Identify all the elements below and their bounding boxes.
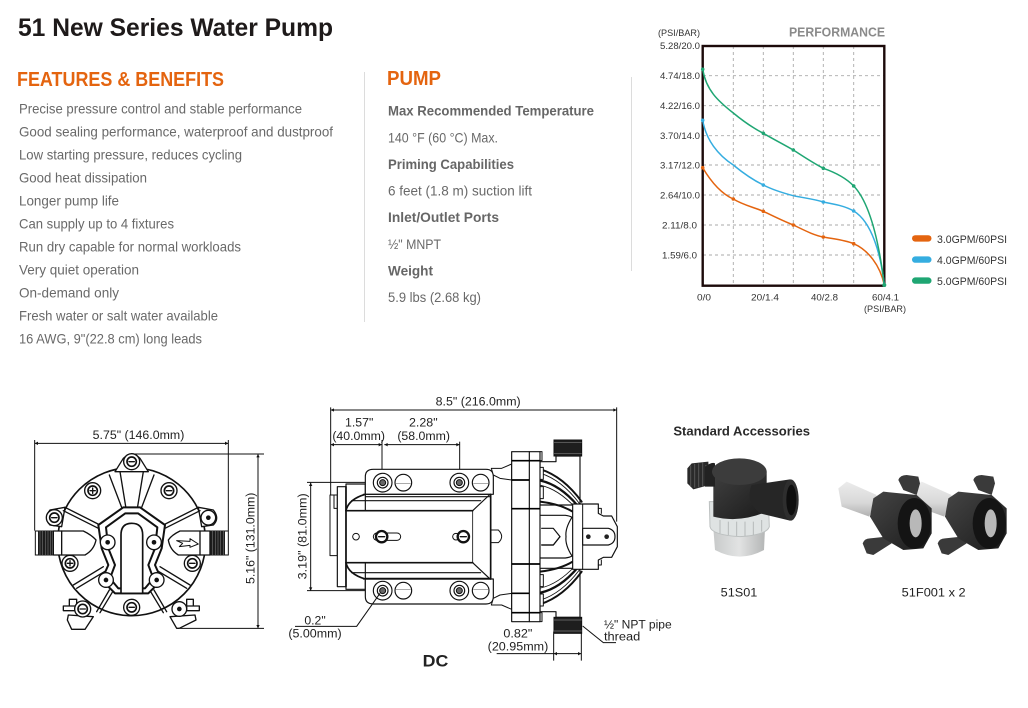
dimension: 2.28 inch: 2.28" (409, 416, 438, 430)
y axis labels: 4.74/18.0 (660, 71, 700, 82)
label: 51F001 x 2: 51F001 x 2 (902, 586, 966, 600)
specification: ports: ½" MNPT (388, 236, 441, 252)
specification: weight: 5.9 lbs (2.68 kg) (388, 289, 481, 305)
x axis labels: 60/4.1 (872, 292, 899, 304)
feature list: Good sealing performance, waterproof and dustproof (19, 124, 333, 140)
specification: weight (388, 262, 481, 305)
dimension: 1.57 inch (331, 416, 385, 483)
dimension: 3.19 inch: 3.19" (81.0mm) (296, 493, 310, 579)
diagram: pump front view (35, 428, 264, 629)
dimension: height: 5.16" (131.0mm) (243, 493, 257, 584)
dimension: 0.2 inch mounting hole: (5.00mm) (288, 626, 342, 640)
accessories heading: Standard Accessories (673, 425, 810, 439)
dimension: width (35, 428, 228, 531)
motor assembly (330, 464, 512, 609)
legend: 4.0GPM/60PSI (937, 255, 1007, 267)
dimension: 0.2 inch mounting hole (288, 593, 380, 640)
x axis labels (697, 292, 906, 315)
dimension: height (133, 454, 264, 628)
dimension: 0.82 inch port: 0.82" (503, 626, 532, 640)
specification: weight: Weight (388, 262, 433, 278)
feature list: Low starting pressure, reduces cycling (19, 146, 242, 162)
feature list: Fresh water or salt water available (19, 308, 218, 324)
feature list: Longer pump life (19, 192, 119, 208)
y axis labels: 2.11/8.0 (662, 220, 697, 232)
dimension: 0.82 inch port (488, 626, 581, 661)
pump head flange (512, 452, 542, 622)
heading: features and benefits: FEATURES & BENEFITS (17, 69, 224, 91)
legend: 5.0GPM/60PSI (937, 276, 1007, 288)
motor body (346, 464, 512, 609)
y axis labels: 1.59/6.0 (662, 250, 697, 262)
label: DC: DC (423, 653, 449, 671)
right port (168, 531, 228, 555)
y axis labels: 3.17/12.0 (660, 160, 700, 172)
callout: NPT pipe thread: ½" NPT pipe (604, 617, 672, 631)
y axis labels (658, 28, 700, 262)
legend: 3.0GPM/60PSI (937, 234, 1007, 246)
specification: max temperature (388, 102, 594, 146)
label: 51S01: 51S01 (721, 586, 758, 600)
x axis labels: 40/2.8 (811, 292, 838, 304)
curve: 3.0GPM (701, 166, 884, 285)
pump head (512, 440, 617, 633)
y axis labels: 2.64/10.0 (660, 190, 700, 202)
pump screws (46, 454, 216, 617)
specification: ports: Inlet/Outlet Ports (388, 209, 499, 225)
feature list: 16 AWG, 9"(22.8 cm) long leads (19, 330, 202, 346)
feature list: Very quiet operation (19, 262, 139, 278)
accessory: strainer 51S01 (687, 458, 799, 557)
feature list (19, 100, 333, 346)
x axis labels: 20/1.4 (751, 292, 779, 304)
y axis labels: 3.70/14.0 (660, 131, 700, 142)
chart heading: PERFORMANCE (789, 24, 885, 40)
dimension: overall length: 8.5" (216.0mm) (436, 395, 521, 409)
diagram: pump side view (288, 395, 672, 671)
specification: priming: 6 feet (1.8 m) suction lift (388, 182, 532, 198)
callout: NPT pipe thread (583, 617, 672, 644)
dimension: 1.57 inch: 1.57" (345, 416, 373, 430)
y axis labels: 5.28/20.0 (660, 41, 700, 52)
legend (912, 234, 1007, 288)
pump housing (58, 468, 206, 616)
motor end cap (330, 487, 346, 587)
pump feet (63, 599, 199, 629)
dimension: width: 5.75" (146.0mm) (93, 428, 184, 442)
panel: standard accessories (673, 425, 1007, 600)
dimension: 2.28 inch: (58.0mm) (397, 429, 450, 443)
chart frame (703, 46, 884, 286)
panel: performance chart (658, 24, 1007, 315)
left port (35, 531, 96, 555)
pump head dome and ports (540, 440, 582, 633)
specification: ports (388, 209, 499, 252)
feature list: On-demand only (19, 284, 119, 300)
dimension: overall length (331, 395, 617, 556)
panel: pump specifications (387, 68, 594, 305)
callout: NPT pipe thread: thread (604, 630, 640, 644)
feature list: Good heat dissipation (19, 170, 147, 186)
feature list: Run dry capable for normal workloads (19, 238, 241, 254)
specification: priming (388, 156, 532, 198)
heading: pump: PUMP (387, 68, 441, 90)
pump lugs and ribs (47, 454, 217, 613)
x axis labels: 0/0 (697, 292, 711, 304)
curve: 5.0GPM (701, 68, 886, 287)
pressure switch (573, 504, 617, 569)
specification: priming: Priming Capabilities (388, 156, 514, 172)
feature list: Can supply up to 4 fixtures (19, 216, 174, 232)
dimension: 3.19 inch (296, 482, 368, 591)
panel: features and benefits (17, 69, 333, 346)
dimension: 0.82 inch port: (20.95mm) (488, 640, 548, 654)
y axis labels: 4.22/16.0 (660, 101, 700, 112)
dimension: 2.28 inch (384, 416, 460, 483)
accessory: couplers 51F001 (838, 475, 1007, 555)
title: 51 New Series Water Pump (18, 14, 333, 42)
dimension: 1.57 inch: (40.0mm) (332, 429, 385, 443)
dimension: 0.2 inch mounting hole: 0.2" (304, 613, 326, 627)
specification: max temperature: Max Recommended Temperature (388, 102, 594, 118)
x axis labels: (PSI/BAR) (864, 304, 906, 315)
specification: max temperature: 140 °F (60 °C) Max. (388, 130, 498, 146)
curve: 4.0GPM (701, 118, 884, 285)
y axis labels: (PSI/BAR) (658, 28, 700, 39)
feature list: Precise pressure control and stable performance (19, 100, 302, 116)
